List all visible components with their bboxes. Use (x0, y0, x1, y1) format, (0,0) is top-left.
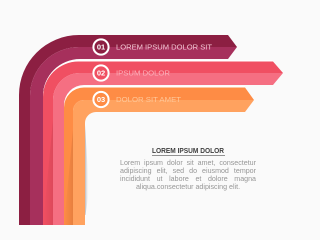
body text: adipiscing elit, sed do eiusmod tempor (120, 167, 256, 175)
label 3: DOLOR SIT AMET (116, 95, 181, 104)
number badge 02: 02 (97, 69, 105, 78)
number badge 02 (93, 65, 109, 81)
page shadow (85, 125, 89, 215)
band fold shadows (43, 120, 73, 225)
band 1: maroon ribbon (19, 35, 237, 225)
body text: Lorem ipsum dolor sit amet, consectetur (120, 158, 256, 166)
label 1: LOREM IPSUM DOLOR SIT (116, 43, 212, 52)
body text: incididunt ut labore et dolore magna (120, 175, 256, 183)
label 2: IPSUM DOLOR (116, 69, 170, 78)
number badge 03: 03 (97, 95, 105, 104)
heading: LOREM IPSUM DOLOR (152, 146, 225, 155)
number badge 03 (93, 92, 109, 107)
band 2: red ribbon (43, 60, 283, 225)
band 3: orange ribbon (64, 86, 254, 225)
number badge 01 (93, 39, 109, 55)
heading underline (152, 154, 225, 157)
body text (120, 158, 256, 191)
number badge 01: 01 (97, 43, 105, 52)
body text: aliqua.consectetur adipiscing elit. (136, 183, 240, 191)
